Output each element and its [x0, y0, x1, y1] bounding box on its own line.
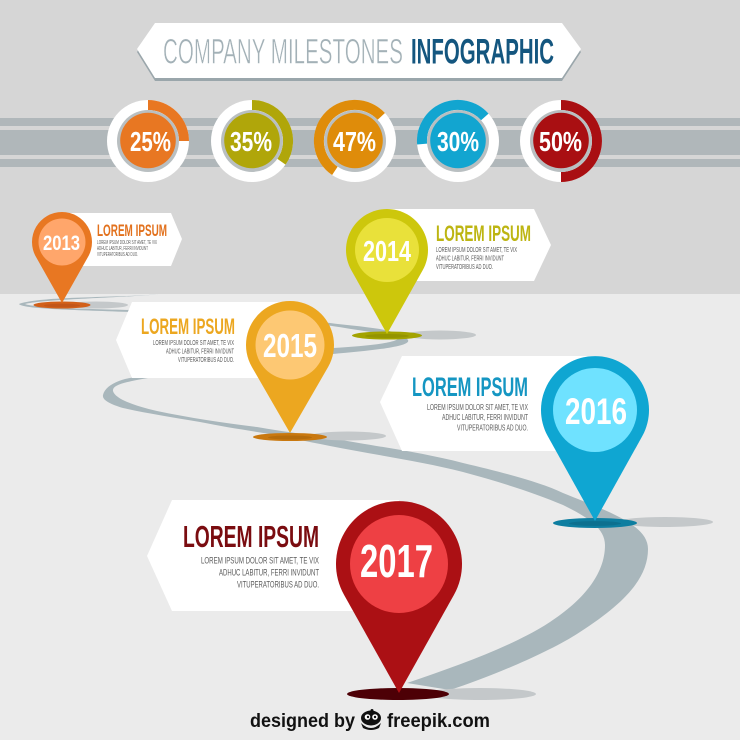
- body text 2015: LOREM IPSUM DOLOR SIT AMET, TE VIX: [153, 340, 234, 347]
- body text 2017: ADHUC LABITUR, FERRI INVIDUNT: [219, 568, 319, 578]
- icon: freepik mascot: [361, 709, 381, 730]
- milestone 2013: [32, 212, 182, 308]
- progress ring: 30%: [417, 100, 499, 182]
- freepik credit: [250, 709, 490, 732]
- progress ring: 25%: 25%: [130, 126, 171, 157]
- milestone 2016: [380, 356, 713, 528]
- progress ring: 47%: [314, 100, 396, 182]
- pin 2014: [346, 209, 428, 334]
- milestone 2014: [346, 209, 551, 340]
- pin 2014: 2014: [363, 236, 411, 268]
- milestone 2017: [147, 500, 536, 700]
- title text: company milestones: COMPANY MILESTONES: [163, 32, 403, 72]
- pin 2016: 2016: [565, 391, 627, 432]
- body text 2017: LOREM IPSUM DOLOR SIT AMET, TE VIX: [201, 556, 319, 566]
- progress ring: 35%: 35%: [230, 126, 272, 157]
- progress ring: 25%: [107, 100, 189, 182]
- freepik credit: designed by: [250, 710, 355, 732]
- heading 2013: LOREM IPSUM: [97, 222, 167, 240]
- body text 2016: [427, 403, 528, 432]
- progress ring: 50%: [520, 100, 602, 182]
- heading 2014: LOREM IPSUM: [436, 221, 531, 246]
- body text 2014: VITUPERATORIBUS AD DUO.: [436, 264, 493, 271]
- body text 2013: VITUPERATORIBUS AD DUO.: [97, 252, 138, 258]
- pin 2013: [32, 212, 92, 303]
- body text 2013: ADHUC LABITUR, FERRI INVIDUNT: [97, 246, 148, 252]
- pin 2016: [541, 356, 649, 521]
- body text 2016: VITUPERATORIBUS AD DUO.: [457, 424, 528, 432]
- body text 2015: ADHUC LABITUR, FERRI INVIDUNT: [166, 348, 234, 356]
- body text 2014: LOREM IPSUM DOLOR SIT AMET, TE VIX: [436, 247, 517, 254]
- body text 2016: LOREM IPSUM DOLOR SIT AMET, TE VIX: [427, 403, 528, 412]
- body text 2014: ADHUC LABITUR, FERRI INVIDUNT: [436, 256, 504, 262]
- body text 2017: VITUPERATORIBUS AD DUO.: [237, 580, 319, 590]
- pin 2017: 2017: [360, 535, 433, 587]
- pin 2017: [336, 501, 462, 693]
- progress ring: 50%: 50%: [539, 126, 582, 157]
- heading 2017: LOREM IPSUM: [183, 519, 319, 554]
- body text 2015: [153, 340, 234, 364]
- progress ring: 30%: 30%: [437, 126, 479, 157]
- pin 2015: 2015: [263, 327, 317, 364]
- body text 2013: LOREM IPSUM DOLOR SIT AMET, TE VIX: [97, 240, 157, 246]
- heading 2015: LOREM IPSUM: [141, 314, 235, 339]
- body text 2013: [97, 240, 157, 258]
- milestone 2015: [116, 301, 386, 441]
- pin 2015: [246, 301, 334, 433]
- title text: infographic: INFOGRAPHIC: [411, 32, 554, 72]
- body text 2016: ADHUC LABITUR, FERRI INVIDUNT: [442, 413, 528, 422]
- progress ring: 47%: 47%: [333, 126, 376, 157]
- freepik credit: freepik.com: [387, 710, 490, 732]
- progress ring: 35%: [211, 100, 293, 182]
- title banner: [137, 23, 581, 81]
- winding road: [19, 294, 648, 690]
- body text 2017: [201, 556, 319, 590]
- pin 2013: 2013: [43, 232, 80, 255]
- body text 2014: [436, 247, 517, 271]
- heading 2016: LOREM IPSUM: [412, 372, 528, 402]
- body text 2015: VITUPERATORIBUS AD DUO.: [178, 357, 234, 364]
